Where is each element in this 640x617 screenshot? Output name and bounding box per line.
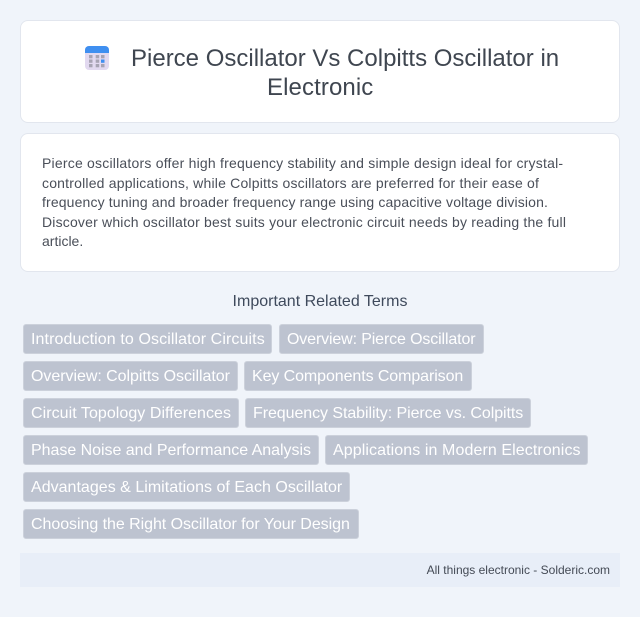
tag (23, 324, 272, 354)
tag (23, 472, 350, 502)
tag: Applications in Modern Electronics (333, 442, 581, 459)
footer text: All things electronic - Solderic.com (427, 563, 610, 577)
title: Pierce Oscillator Vs Colpitts Oscillator in (131, 45, 559, 72)
tag (23, 361, 238, 391)
tag (23, 398, 239, 428)
title: Electronic (267, 74, 373, 101)
panel: summary text: controlled applications, while Colpitts oscillators are preferred for their ease of (42, 175, 539, 191)
tag: Overview: Colpitts Oscillator (31, 368, 230, 385)
panel: tag list (23, 324, 588, 539)
tag (279, 324, 484, 354)
tag (325, 435, 588, 465)
tag: Phase Noise and Performance Analysis (31, 442, 311, 459)
tag: Choosing the Right Oscillator for Your Design (31, 516, 350, 533)
title (131, 45, 559, 101)
panel: summary text: frequency tuning and broader frequency range using capacitive voltage division. (42, 194, 548, 210)
tag: Circuit Topology Differences (31, 405, 231, 422)
tag: Overview: Pierce Oscillator (287, 331, 475, 348)
tag (23, 509, 359, 539)
tag: Frequency Stability: Pierce vs. Colpitts (253, 405, 523, 422)
tag: Introduction to Oscillator Circuits (31, 331, 265, 348)
tag (23, 435, 319, 465)
tag (244, 361, 472, 391)
tag: Advantages & Limitations of Each Oscillator (31, 479, 342, 496)
icon: calendar app (85, 46, 109, 70)
tag (245, 398, 531, 428)
panel: summary text: Discover which oscillator best suits your electronic circuit needs by reading the full (42, 214, 566, 230)
tag: Key Components Comparison (252, 368, 463, 385)
panel: summary text: article. (42, 233, 83, 249)
heading: related terms: Important Related Terms (233, 293, 407, 310)
panel: summary text: Pierce oscillators offer high frequency stability and simple design ideal for crystal- (42, 155, 563, 171)
panel: title card (20, 20, 620, 123)
footer bar (20, 553, 620, 587)
panel: summary text (20, 133, 620, 272)
